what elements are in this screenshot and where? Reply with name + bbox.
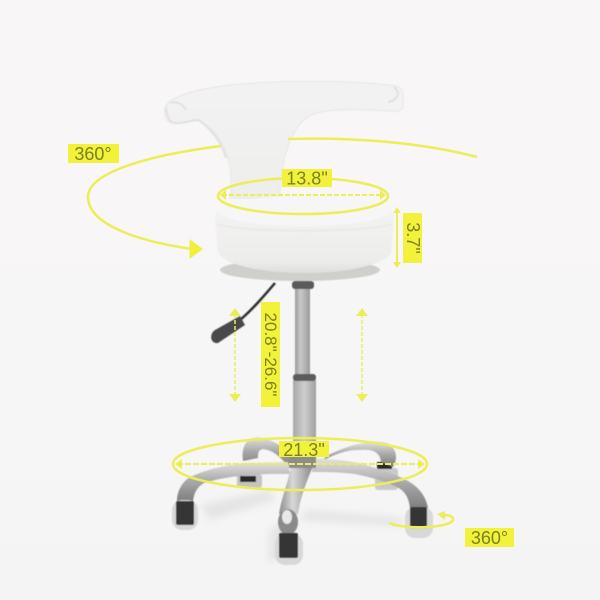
post: [295, 289, 310, 377]
back legs: [243, 437, 396, 467]
seat cushion: [215, 196, 394, 281]
label: 3.7 inches: 3.7": [403, 222, 423, 254]
rotation arrow: seat 360: [88, 139, 477, 258]
seat body: [215, 197, 394, 273]
base diameter ellipse: [173, 438, 427, 490]
seat diameter ellipse: [218, 178, 388, 214]
front legs: [177, 458, 428, 535]
label: 21.3 inches: 21.3": [283, 440, 325, 460]
label: 360 seat rotation: 360°: [74, 144, 112, 164]
backrest edge shading: [166, 87, 398, 158]
floor shadows: [200, 490, 405, 562]
hub: [289, 456, 316, 468]
right height arrow: [356, 308, 368, 402]
label: height range: 20.8"-26.6": [261, 313, 280, 396]
label: 13.8 inches: 13.8": [286, 168, 328, 188]
left height arrow: [229, 308, 241, 402]
post ring: [293, 374, 316, 381]
caster rotation arrow: [389, 511, 453, 527]
backrest: [165, 81, 403, 198]
label: 3.7 inches: [403, 213, 423, 263]
lift collar: [292, 281, 314, 289]
outer tube: [293, 380, 316, 452]
seat underside metal plate: [220, 259, 380, 281]
front casters: [172, 500, 433, 565]
seat height arrow: [393, 207, 401, 268]
seat top highlight: [218, 196, 390, 226]
back casters: [237, 462, 398, 490]
gas lever: [211, 283, 275, 343]
stool: [165, 81, 433, 565]
label: 360 caster rotation: 360°: [471, 528, 508, 548]
